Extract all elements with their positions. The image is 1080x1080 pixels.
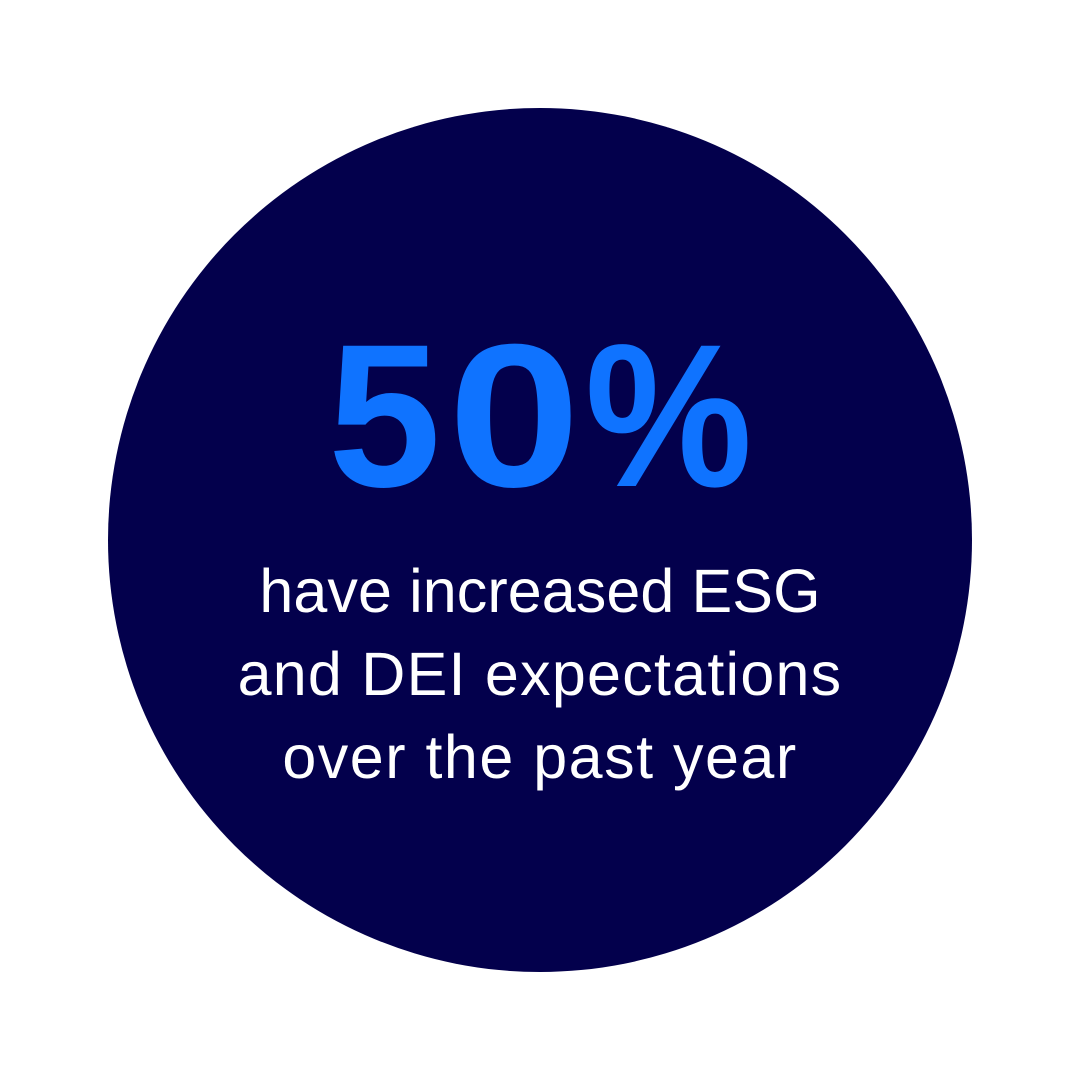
big statistic: 50%: % [585, 301, 753, 530]
text block: description [238, 557, 842, 791]
text block: description: have increased ESG [259, 557, 821, 625]
panel: navy circle [108, 108, 972, 972]
big statistic: 50%: 0 [448, 301, 580, 530]
big statistic: 50%: 5 [328, 301, 441, 530]
big statistic: 50% [328, 301, 753, 530]
text block: description: over the past year [282, 723, 798, 791]
text block: description: and DEI expectations [238, 640, 842, 708]
